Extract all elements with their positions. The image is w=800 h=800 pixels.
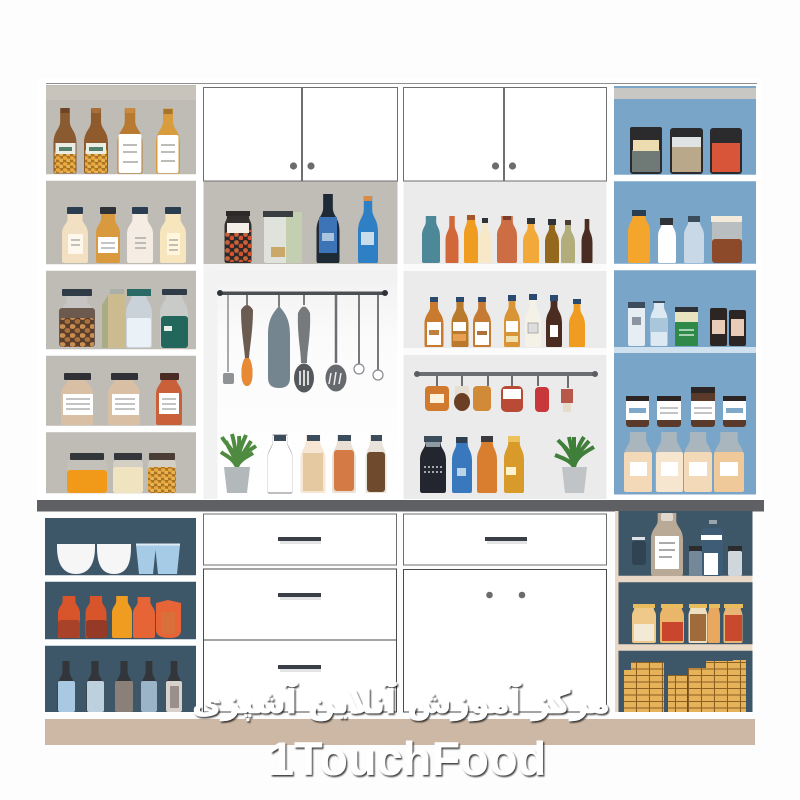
utensil: ring ladle: [354, 295, 364, 374]
dark top bottle row: [58, 661, 182, 712]
rail: [414, 371, 598, 377]
utensil: ring ladle: [373, 295, 383, 380]
jar: dark labelled: [710, 308, 727, 346]
panel: upper right blue shelves: [614, 86, 756, 499]
bottle row: labelled sauces: [424, 294, 585, 347]
bottle: amber with label: [118, 108, 142, 174]
drawer: bottom: [204, 640, 396, 712]
door knobs: [290, 162, 315, 170]
bottle: dark brown: [582, 219, 592, 263]
container row: shelf 3: [628, 301, 746, 346]
jar: golden contents: [148, 453, 176, 493]
orange jug row: [58, 596, 181, 638]
jar: beige: [108, 373, 140, 425]
panel: upper left shelves: [46, 85, 196, 499]
bottle: amber: [424, 297, 444, 347]
bottle: olive amber: [545, 219, 559, 263]
hanging jar: red with label: [501, 376, 523, 412]
jar row: small: [626, 387, 746, 427]
jug: orange: [112, 596, 132, 638]
bottle: golden: [504, 295, 520, 347]
utensil: skimmer: [326, 295, 346, 392]
bottle: dark brown: [546, 295, 562, 347]
bottle: brown nuts: [366, 435, 386, 493]
utensil: gray spatula: [268, 295, 290, 388]
bottle row: sauces: [422, 215, 592, 263]
bottle: large tan: [651, 513, 683, 576]
jar: pale: [632, 604, 656, 643]
bottle: cream: [478, 218, 492, 263]
bottle: red orange: [446, 216, 458, 263]
panel: upper center-right cupboard: [404, 88, 606, 499]
jar: beige: [61, 373, 93, 425]
jar: narrow: [708, 604, 720, 643]
bottle: peach: [624, 432, 652, 492]
countertop: [37, 500, 764, 512]
bottle: peach grains: [300, 435, 326, 493]
drawer: top: [404, 514, 606, 565]
jar group: navy with labels: [689, 520, 742, 576]
container: orange red: [156, 600, 181, 638]
utensil: orange spoon: [241, 295, 253, 386]
bottle row: center bottom: [268, 435, 386, 493]
door knobs: [492, 162, 516, 170]
jar: dark with chunks: [224, 211, 252, 263]
jar: gray with cream label: [630, 127, 662, 174]
jar: dark with label: [626, 396, 649, 427]
door: [404, 570, 606, 712]
jar: brown contents: [711, 216, 742, 263]
jar: tomato: [724, 604, 743, 643]
bottle: golden with label: [156, 108, 180, 174]
bottle: blue: [358, 196, 378, 263]
drawer: middle: [204, 569, 396, 640]
jar: orange contents: [67, 453, 107, 493]
jar: green liquid: [160, 289, 188, 348]
bottle row: large bottles: [420, 436, 524, 493]
bottle: orange: [477, 436, 497, 493]
rail: [217, 290, 388, 296]
bottle: pale yellow: [160, 207, 186, 263]
cabinet frame: [37, 78, 762, 500]
bottle: pale green pickles: [561, 220, 575, 263]
bottle: orange grains: [332, 435, 356, 493]
jug: orange red: [133, 597, 155, 638]
base plinth: [45, 719, 755, 745]
jug: red orange: [86, 596, 107, 638]
jar: mixed: [688, 604, 708, 643]
bottle: amber: [452, 297, 468, 347]
jug: red orange: [58, 596, 80, 638]
jar: dark with label: [723, 396, 746, 427]
bottle: amber: [96, 207, 120, 263]
bottle: white cosmetics: [628, 302, 645, 346]
bottle: orange: [628, 210, 650, 263]
panel: lower drawers left: [204, 514, 396, 712]
hanging jar: amber: [473, 376, 491, 411]
jar: dim navy: [632, 537, 646, 565]
jar: red: [710, 128, 742, 174]
bottle: amber: [523, 218, 539, 263]
bottle: blue gray: [141, 661, 157, 712]
title: Persian: مرکز آموزش آنلاین آشپزی: [192, 682, 610, 721]
panel: lower right shelves: [615, 511, 752, 712]
cupboard doors: [204, 88, 398, 181]
jar: red orange: [660, 604, 684, 643]
jar: dark with label: [657, 396, 681, 427]
utensil: small fork: [223, 295, 234, 384]
bottle: brown with nuts: [54, 108, 76, 174]
panel: upper center-left cupboard: [204, 88, 398, 499]
bottle row: shelf 2: [628, 210, 742, 263]
bottle: peach: [656, 432, 683, 492]
bottle: dark blue label: [316, 194, 340, 263]
bottle: pale blue: [684, 216, 704, 263]
bottle: white: [525, 294, 541, 347]
bottle: orange: [464, 215, 478, 263]
hanging jar: small: [561, 376, 573, 412]
glass container: [263, 211, 302, 263]
jar: terracotta: [156, 373, 182, 425]
bottle: clear: [650, 301, 668, 346]
bottle: brown with nuts: [84, 108, 108, 174]
bottle: cream: [62, 207, 88, 263]
plant: green in gray pot: [221, 434, 256, 493]
bottle: black: [420, 436, 446, 493]
bottle: peach: [684, 432, 712, 492]
hanging jar: bright red: [535, 376, 549, 412]
bottle: mustard: [504, 436, 524, 493]
bottle: milk: [126, 289, 152, 348]
bottle: teal: [422, 216, 440, 263]
jar row: shelf 3: [59, 289, 188, 348]
hanging jar: brown: [454, 376, 470, 411]
panel: lower drawer and door right: [404, 514, 606, 712]
bottle: blue water: [58, 661, 75, 712]
jar: tall with label: [691, 387, 715, 427]
rail with utensils: [217, 290, 388, 392]
bottle: white: [658, 218, 676, 263]
door knobs: [486, 592, 525, 598]
bottle: amber: [473, 297, 491, 347]
bottle: gray: [115, 661, 133, 712]
bottle: terracotta: [497, 216, 517, 263]
hanging jar: orange: [425, 376, 449, 411]
container: green: [675, 307, 698, 346]
title: brand name: 1TouchFood: [268, 732, 546, 785]
bottle: white gray: [166, 661, 182, 712]
rail with hanging jars: [414, 371, 598, 412]
jar row: shelf 5: [67, 453, 176, 493]
jar: nuts: [59, 289, 95, 348]
carton: olive and beige: [102, 289, 125, 348]
shelf boards: [46, 178, 196, 496]
jar: cream contents: [113, 453, 143, 493]
jar row: preserves: [632, 604, 743, 643]
jar: sand: [670, 128, 703, 174]
plant: green in gray pot: [555, 437, 594, 493]
blue cups: [136, 544, 180, 574]
cupboard doors: [404, 88, 606, 181]
drawer: top: [204, 514, 396, 565]
utensil: slotted spoon: [294, 295, 314, 392]
bottle: white: [127, 207, 153, 263]
bottle row: peach: [624, 432, 744, 492]
bottle: white: [268, 435, 292, 493]
bottle: peach: [714, 432, 744, 492]
bottle: pale water: [86, 661, 104, 712]
stacked crackers: [624, 660, 746, 712]
jar row: shelf 4: [61, 373, 182, 425]
bottle: blue: [452, 437, 472, 493]
panel: lower left shelves: [45, 518, 196, 712]
white bowls: [57, 544, 131, 574]
bottle: orange: [569, 299, 585, 347]
bottle row: shelf 2: [62, 207, 186, 263]
jar: dark labelled: [729, 310, 746, 346]
